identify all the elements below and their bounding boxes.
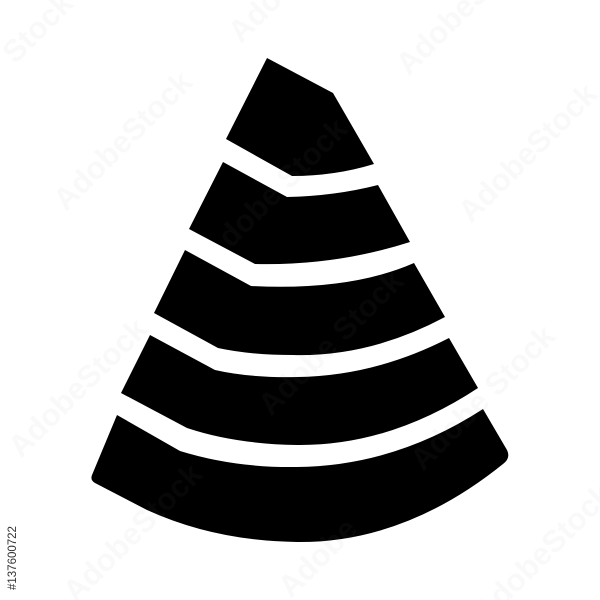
cone layer 2 [189,162,410,264]
stock watermark: Adobe Stock [251,263,410,422]
stock watermark: dobe Stock [211,111,355,254]
layered cone chart [91,58,508,542]
cone layer 3 [154,250,445,355]
stock watermark: AdobeStock [46,64,199,217]
stock watermark: AdobeStock [1,311,154,464]
stock image id: #137600722 [7,526,19,590]
cone layer 5: base [91,409,508,542]
cone layer 4 [121,335,478,445]
stock watermark: AdobeStock [451,76,600,229]
stock watermark: Adobe Stock [403,318,562,477]
cone layer 1: top [226,58,374,176]
